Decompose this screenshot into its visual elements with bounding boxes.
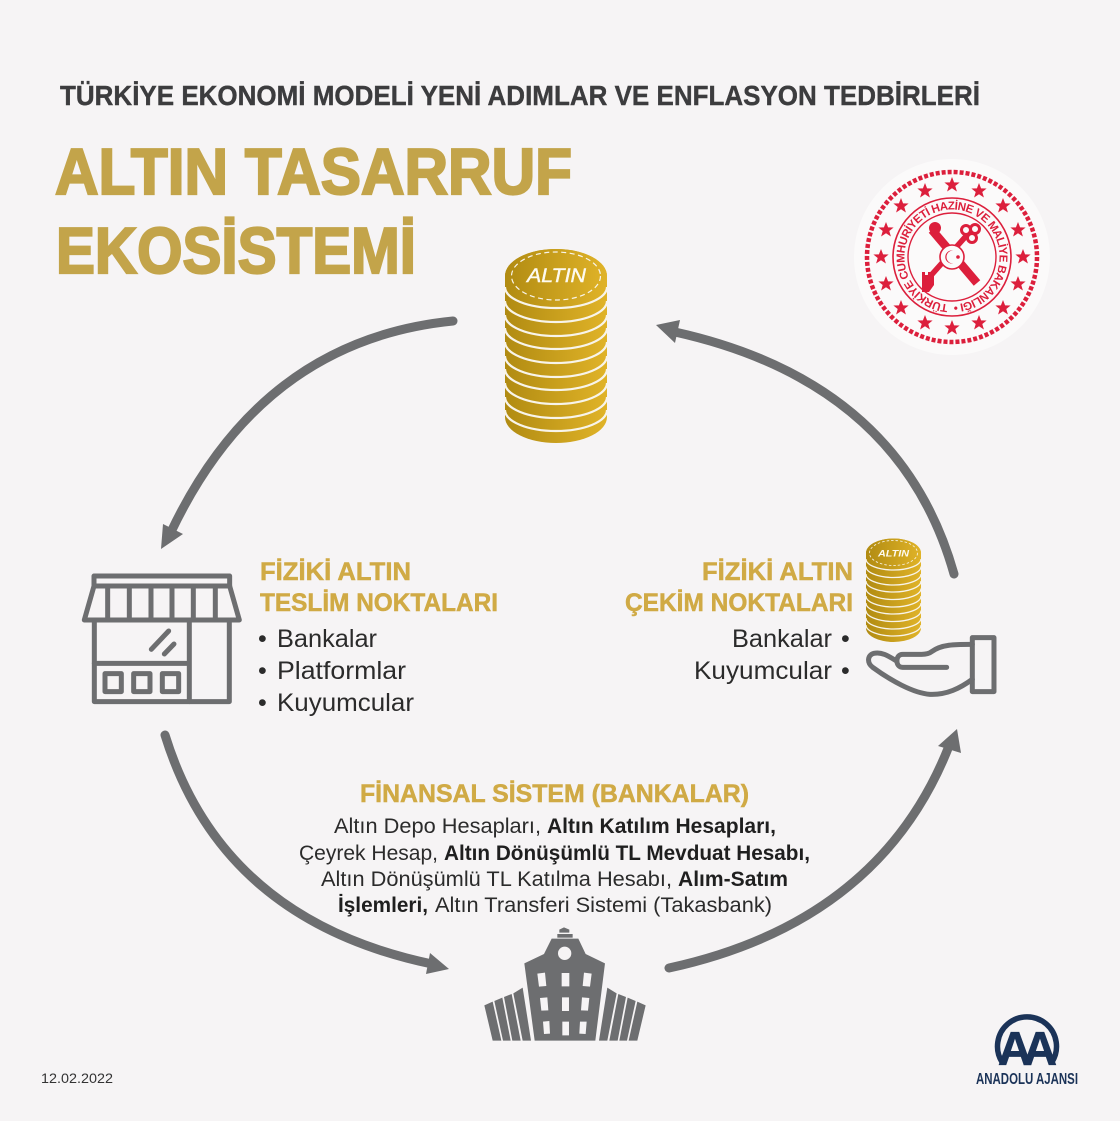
delivery points text: • xyxy=(258,657,267,685)
seal scroll and key emblem xyxy=(922,222,980,292)
arrow: banks to withdrawal points xyxy=(669,729,961,968)
financial system heading: FİNANSAL SİSTEM (BANKALAR) xyxy=(360,780,749,808)
withdrawal points text: • xyxy=(841,657,850,685)
financial system text: Altın Katılım Hesapları, xyxy=(547,815,776,838)
withdrawal points text: ÇEKİM NOKTALARI xyxy=(625,589,853,617)
withdrawal points text xyxy=(625,558,853,685)
Anadolu Ajansı logo xyxy=(976,1017,1078,1088)
arrow: delivery points to banks xyxy=(165,735,449,974)
Anadolu Ajansı logo: ANADOLU AJANSI xyxy=(976,1071,1078,1088)
financial system text: Çeyrek Hesap, xyxy=(299,842,438,865)
icon: open hand xyxy=(869,638,994,694)
delivery points text xyxy=(258,558,498,717)
header title: TÜRKİYE EKONOMİ MODELİ YENİ ADIMLAR VE ENFLASYON TEDBİRLERİ xyxy=(60,80,980,111)
delivery points text: TESLİM NOKTALARI xyxy=(260,589,498,617)
small gold coin stack: ALTIN xyxy=(877,548,910,558)
main heading: EKOSİSTEMİ xyxy=(56,214,416,287)
delivery points text: FİZİKİ ALTIN xyxy=(260,558,411,586)
ministry seal xyxy=(864,170,1040,344)
financial system text: Altın Depo Hesapları, xyxy=(334,815,541,838)
financial system text: Altın Transferi Sistemi (Takasbank) xyxy=(435,894,772,917)
delivery points text: Platformlar xyxy=(277,657,406,685)
date: 12.02.2022 xyxy=(41,1070,113,1086)
Anadolu Ajansı logo: AA xyxy=(998,1022,1056,1075)
small gold coin stack xyxy=(866,538,921,642)
delivery points text: Kuyumcular xyxy=(277,689,414,717)
withdrawal points text: Bankalar xyxy=(732,625,832,653)
financial system text xyxy=(299,815,810,917)
large gold coin stack xyxy=(505,249,607,443)
main heading xyxy=(55,135,572,287)
delivery points text: • xyxy=(258,689,267,717)
arrow: withdrawal points to coins xyxy=(656,320,954,574)
financial system text: İşlemleri, xyxy=(338,894,428,917)
icon: bank building xyxy=(484,927,646,1041)
icon: store xyxy=(84,576,239,702)
withdrawal points text: • xyxy=(841,625,850,653)
withdrawal points text: Kuyumcular xyxy=(694,657,832,685)
delivery points text: Bankalar xyxy=(277,625,377,653)
financial system text: Altın Dönüşümlü TL Mevduat Hesabı, xyxy=(444,842,810,865)
financial system text: Altın Dönüşümlü TL Katılma Hesabı, xyxy=(321,868,672,891)
delivery points text: • xyxy=(258,625,267,653)
financial system text: Alım-Satım xyxy=(678,868,788,891)
ministry seal: TÜRKİYE CUMHURİYETİ HAZİNE VE MALİYE BAKANLIĞI • xyxy=(896,200,1008,312)
withdrawal points text: FİZİKİ ALTIN xyxy=(702,558,853,586)
arrow: coins to delivery points xyxy=(161,321,453,549)
main heading: ALTIN TASARRUF xyxy=(55,135,572,208)
large gold coin stack: ALTIN xyxy=(526,266,586,287)
